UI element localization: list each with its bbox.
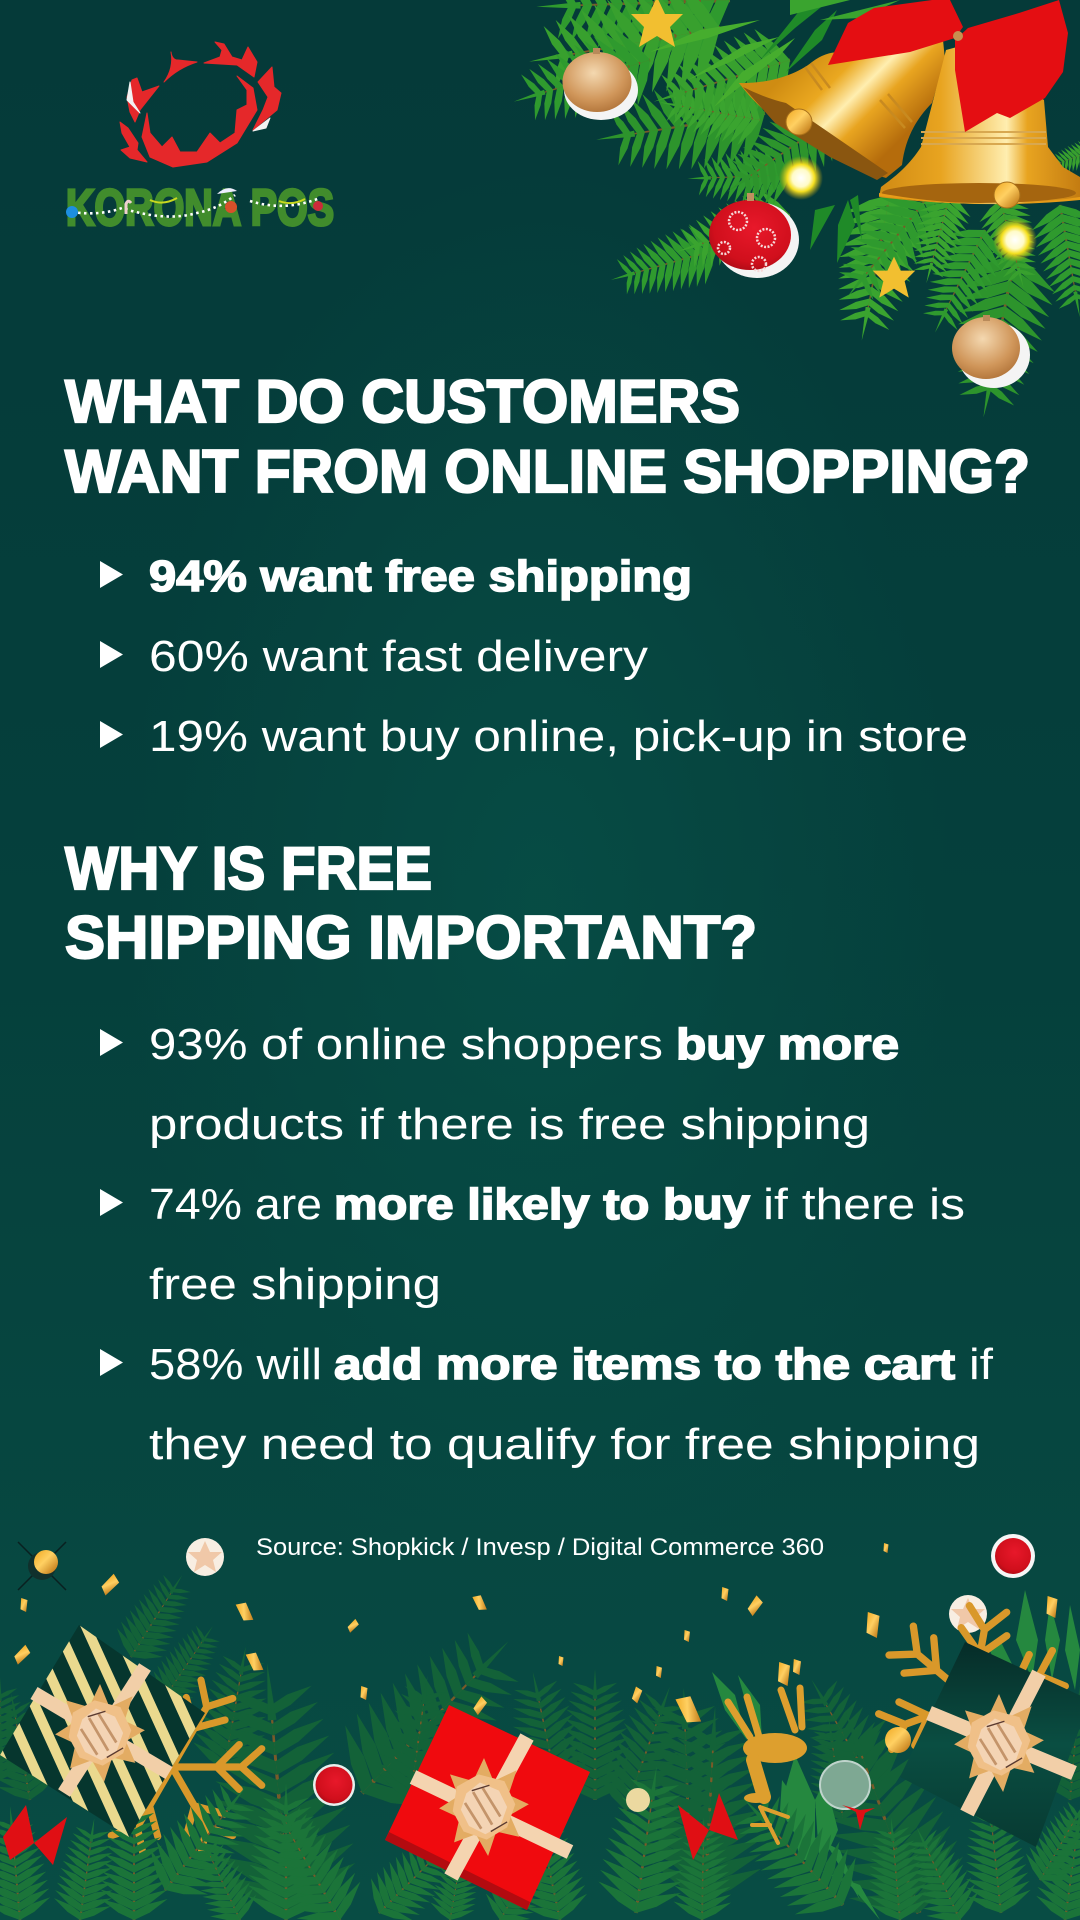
- bullet: 93% buy more: products if there is free shipping: [149, 1100, 870, 1149]
- ornament: glass ball: [820, 1761, 870, 1809]
- bullet: 94% free shipping: 94% want free shipping: [149, 552, 692, 601]
- bullet: 74% more likely to buy: [100, 1180, 965, 1309]
- gift: dark green box: [900, 1642, 1080, 1847]
- floating star bauble behind flake: [949, 1595, 987, 1633]
- string lights: [66, 188, 323, 218]
- bullet: 74% more likely to buy: if there is: [763, 1180, 965, 1229]
- ornament: dark gold ball: [18, 1542, 66, 1590]
- gift: striped box: [0, 1625, 205, 1837]
- pine sprigs front layer: [0, 1760, 1080, 1920]
- floating ornaments: [18, 1534, 1035, 1590]
- gold snowflakes: [50, 1593, 1078, 1889]
- ornament: lower gold ball: [952, 315, 1030, 388]
- icon: right bell: [879, 47, 1080, 208]
- heading: why is free shipping important: WHY IS FREE: [65, 835, 432, 902]
- icon: glowing lights: [779, 156, 1037, 262]
- heading: what do customers want: [65, 368, 1030, 505]
- ornament: small gold balls: [626, 1727, 911, 1812]
- pine sprigs back layer: [0, 1560, 1080, 1920]
- bullet: 93% buy more: buy more: [676, 1020, 899, 1069]
- bullet: 74% more likely to buy: free shipping: [149, 1260, 441, 1309]
- ornament: gold ball: [562, 48, 638, 120]
- heading: why is free shipping important: [65, 835, 757, 971]
- ornament: red bauble: [991, 1534, 1035, 1578]
- decoration: top-right pine branches with bells: [502, 0, 1080, 426]
- icon: red bows: [3, 1793, 875, 1865]
- heading: what do customers want: WANT FROM ONLINE SHOPPING?: [65, 438, 1030, 505]
- heading: what do customers want: WHAT DO CUSTOMERS: [65, 368, 740, 435]
- ornament: red ball: [313, 1764, 355, 1806]
- heading: why is free shipping important: SHIPPING IMPORTANT?: [65, 904, 757, 971]
- pine branches: [502, 0, 1080, 426]
- logo wordmark: KORONA POS: [66, 179, 334, 236]
- bullet: 58% add more items: 58% will: [149, 1340, 322, 1389]
- decoration: bottom foliage and gifts: [0, 1534, 1080, 1920]
- source line: Source: Shopkick / Invesp / Digital Commerce 360: [256, 1534, 824, 1561]
- bullet: 58% add more items: they need to qualify for free shipping: [149, 1420, 980, 1469]
- icon: gold stars: [631, 0, 915, 298]
- bullet: 19% buy online pick-up in store: 19% want buy online, pick-up in store: [149, 712, 968, 761]
- list: why free shipping matters: [100, 1020, 994, 1469]
- icon: gold reindeer: [728, 1688, 807, 1843]
- bullet: 93% buy more: 93% of online shoppers: [149, 1020, 663, 1069]
- ornament: star bauble: [186, 1538, 224, 1576]
- logo: Korona POS: [66, 42, 334, 236]
- big pine blades: [712, 1590, 1080, 1920]
- bullet: 60% fast delivery: 60% want fast delivery: [149, 632, 648, 681]
- bullet: 58% add more items: if: [969, 1340, 994, 1389]
- bullet: 93% buy more: [100, 1020, 899, 1149]
- gold confetti: [12, 1543, 1057, 1728]
- bullet: 58% add more items: [100, 1340, 994, 1469]
- icon: red wreath: [120, 42, 281, 167]
- bullet: 58% add more items: add more items to the cart: [334, 1340, 955, 1389]
- bullet: 74% more likely to buy: 74% are: [149, 1180, 322, 1229]
- icon: red ribbon: [828, 0, 1068, 132]
- ornament: red ball with snowflakes: [709, 193, 799, 278]
- bullet: 74% more likely to buy: more likely to buy: [334, 1180, 751, 1229]
- icon: left bell: [739, 40, 945, 180]
- gift: red box: [385, 1705, 590, 1910]
- list: customer wants: [100, 552, 968, 761]
